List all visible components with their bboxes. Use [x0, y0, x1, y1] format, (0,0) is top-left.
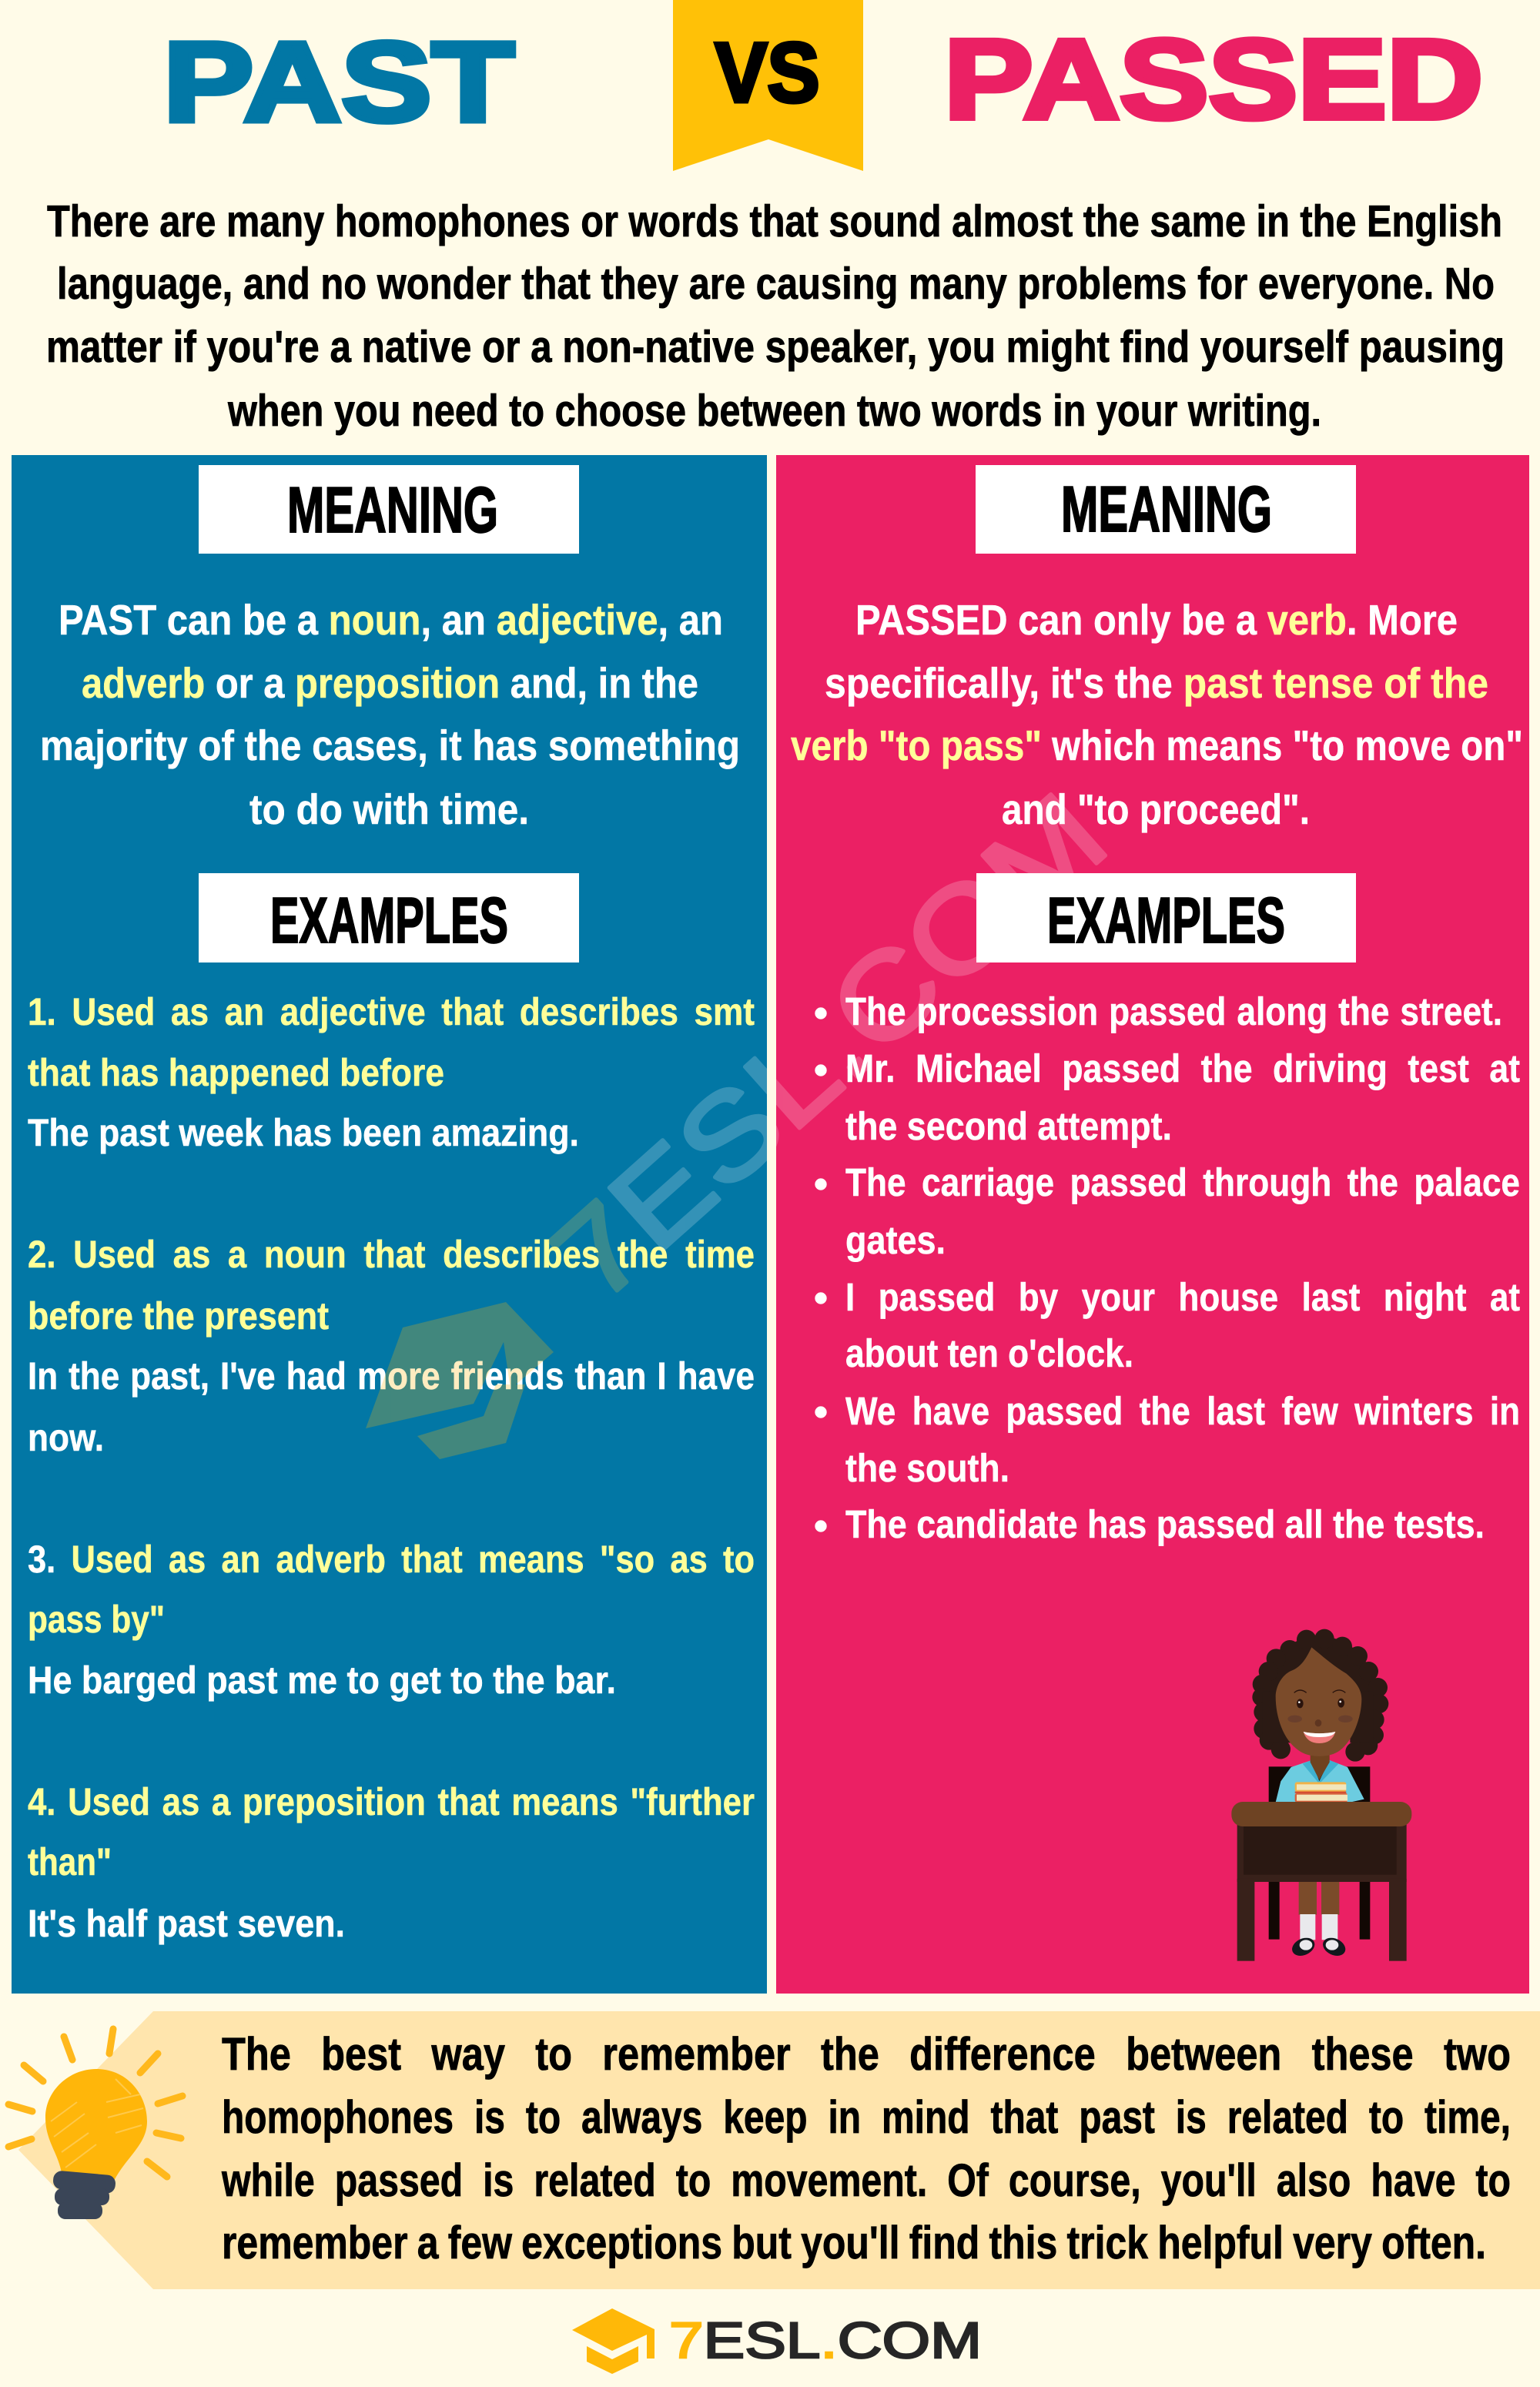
- text: meaning of past: [40, 596, 740, 833]
- heading: meaning (past): MEANING: [287, 474, 498, 546]
- text: meaning of passed: and "to proceed".: [1002, 785, 1310, 833]
- tip text: [221, 2028, 1511, 2268]
- neck: [1311, 1750, 1330, 1780]
- logo cap icon: [572, 2308, 654, 2374]
- watermark logo: [366, 1302, 554, 1459]
- heading: examples (passed): EXAMPLES: [1047, 884, 1285, 956]
- heading: meaning (past): [199, 465, 579, 554]
- watermark text: 7ESL.COM: [527, 768, 1130, 1326]
- example 3: adverb: [28, 1538, 755, 1702]
- bullet list: passed examples: the south.: [845, 1446, 1009, 1490]
- example 4: preposition: 4. Used as a preposition that means "further: [28, 1780, 755, 1823]
- example 4: preposition: [28, 1780, 755, 1945]
- tip banner: [18, 2011, 1540, 2289]
- heading: meaning (passed): [976, 465, 1356, 554]
- heading: examples (past): EXAMPLES: [270, 884, 508, 956]
- books: [1295, 1782, 1348, 1803]
- example 2: noun: now.: [28, 1416, 104, 1459]
- panel: past (blue): [12, 455, 767, 1994]
- bulb rays: [8, 2029, 182, 2177]
- example 1: adjective: 1. Used as an adjective that describes smt: [28, 990, 755, 1033]
- example 4: preposition: It's half past seven.: [28, 1902, 345, 1945]
- intro paragraph: when you need to choose between two words in your writing.: [227, 386, 1321, 436]
- bulb glass: [45, 2069, 147, 2181]
- heading: examples (past): [199, 873, 579, 962]
- text: meaning of past: PAST can be a noun, an adjective, an: [59, 596, 723, 644]
- text: meaning of passed: specifically, it's the past tense of the: [825, 659, 1488, 707]
- example 2: noun: In the past, I've had more friends than I have: [28, 1354, 755, 1398]
- bulb socket: [52, 2170, 116, 2219]
- logo wordmark: 7ESL .COM: [669, 2312, 982, 2369]
- example 1: adjective: that has happened before: [28, 1051, 444, 1094]
- hair: [1252, 1629, 1388, 1762]
- panel: passed (pink): [776, 455, 1529, 1994]
- bullet list: passed examples: [815, 989, 1520, 1546]
- text: meaning of passed: PASSED can only be a verb. More: [855, 596, 1458, 644]
- title: PAST: PAST: [163, 19, 514, 146]
- icon: light bulb: [8, 2029, 182, 2219]
- text: meaning of past: majority of the cases, it has something: [40, 721, 740, 769]
- title: PASSED: PASSED: [944, 17, 1483, 143]
- heading: meaning (passed): MEANING: [1061, 473, 1272, 545]
- dress: [1276, 1760, 1364, 1803]
- girl legs: [1289, 1879, 1348, 1959]
- watermark: 7ESL.COM: [366, 768, 1130, 1459]
- example 3: adverb: He barged past me to get to the bar.: [28, 1659, 616, 1702]
- bullet list: passed examples: gates.: [845, 1218, 946, 1262]
- example 1: adjective: The past week has been amazing.: [28, 1111, 579, 1154]
- facial features: [1287, 1690, 1353, 1743]
- example 2: noun: 2. Used as a noun that describes the time: [28, 1233, 755, 1276]
- example 2: noun: [28, 1233, 755, 1459]
- example 1: adjective: [28, 990, 755, 1154]
- heading: examples (passed): [976, 873, 1356, 962]
- example 2: noun: before the present: [28, 1294, 329, 1337]
- desk: [1231, 1802, 1411, 1961]
- chair: [1269, 1766, 1370, 1940]
- intro paragraph: [46, 196, 1505, 436]
- example 4: preposition: than": [28, 1840, 112, 1883]
- face: [1276, 1647, 1361, 1756]
- ribbon badge: VS: [673, 0, 863, 171]
- logo: 7ESL.COM: [572, 2308, 982, 2374]
- bullet list: passed examples: the second attempt.: [845, 1104, 1172, 1148]
- text: meaning of past: adverb or a preposition and, in the: [82, 659, 698, 707]
- text: meaning of past: to do with time.: [249, 785, 529, 833]
- bullet list: passed examples: about ten o'clock.: [845, 1331, 1133, 1375]
- text: meaning of passed: [791, 596, 1523, 833]
- bulb shading: [51, 2079, 143, 2168]
- example 3: adverb: 3. Used as an adverb that means "so as to: [28, 1538, 755, 1581]
- ribbon badge: VS: VS: [715, 25, 819, 120]
- illustration: girl at desk: [1231, 1629, 1411, 1961]
- example 3: adverb: pass by": [28, 1598, 165, 1641]
